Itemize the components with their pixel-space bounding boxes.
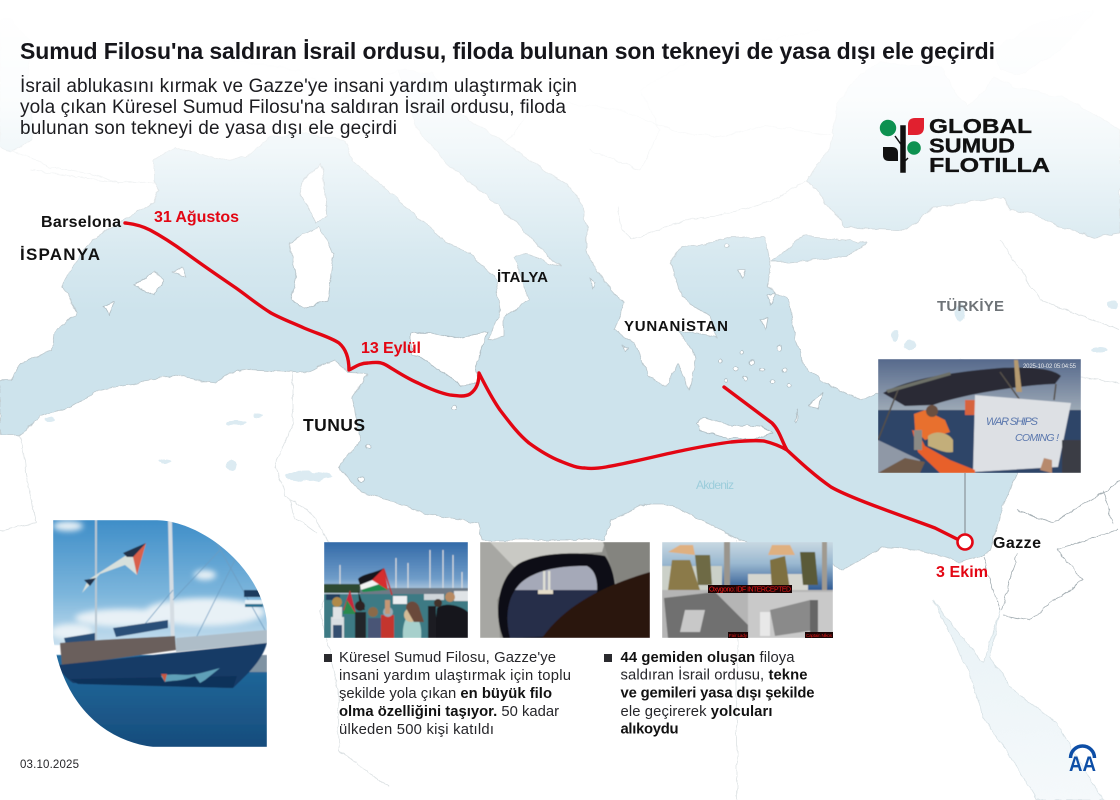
islands xyxy=(104,163,822,483)
text block: bullet 1: ülkeden 500 kişi katıldı xyxy=(339,722,494,738)
date labels: 13 Eylül xyxy=(361,340,421,357)
text block: bullet 2: saldıran İsrail ordusu, tekne xyxy=(620,666,808,684)
sea label: Akdeniz xyxy=(696,478,734,492)
sea: Bay of Biscay xyxy=(0,19,32,152)
text block: bullet 2: 44 gemiden oluşan filoya xyxy=(620,650,795,666)
photo: war ships coming: 2025-10-02 05:04:55 xyxy=(1023,364,1077,370)
sea: Red Sea and gulfs xyxy=(933,600,1103,800)
logo: Global Sumud Flotilla: GLOBAL xyxy=(929,115,1032,138)
people xyxy=(331,592,468,638)
sea: Black Sea xyxy=(807,62,1120,237)
place labels: İSPANYA xyxy=(20,245,100,264)
text block: bullet 2 xyxy=(604,650,814,738)
subtitle: bulunan son tekneyi de yasa dışı ele geçirdi xyxy=(20,118,397,139)
text block: bullet 1: şekilde yola çıkan en büyük filo xyxy=(339,686,552,702)
Gaza marker leader line xyxy=(964,473,966,534)
route line xyxy=(125,223,957,539)
place labels: TUNUS xyxy=(303,415,365,435)
sea: Mediterranean xyxy=(0,70,1040,570)
date labels: 3 Ekim xyxy=(936,564,988,581)
subtitle: İsrail ablukasını kırmak ve Gazze'ye insani yardım ulaştırmak için xyxy=(20,76,577,97)
text block: bullet 2: ele geçirerek yolcuları xyxy=(620,704,772,720)
place labels: Barselona xyxy=(41,214,121,231)
sea: Azov xyxy=(994,10,1094,75)
logo: Global Sumud Flotilla: SUMUD xyxy=(929,134,1015,158)
place labels: TÜRKİYE xyxy=(937,298,1004,315)
photo: crowd with flags at harbour xyxy=(324,542,468,638)
text block: bullet 1 xyxy=(324,650,571,738)
porthole ring xyxy=(498,553,615,638)
text block: bullet 1: olma özelliğini taşıyor. 50 kadar xyxy=(339,704,559,720)
text block: bullet 1: insani yardım ulaştırmak için toplu xyxy=(339,668,571,684)
photo: yacht seen through porthole xyxy=(480,542,650,640)
photo: war ships coming xyxy=(878,359,1081,473)
logo: Anadolu Agency: AA xyxy=(1069,753,1096,776)
place labels: YUNANİSTAN xyxy=(624,318,728,335)
date labels xyxy=(154,209,988,581)
photo: intercepted boat cameras xyxy=(662,542,833,638)
date: 03.10.2025 xyxy=(20,759,79,771)
photo: intercepted boat cameras: Oxygono: IDF INTERCEPTED xyxy=(709,586,791,594)
photo: sailboat xyxy=(50,520,267,747)
photo: intercepted boat cameras: Captain Nikos xyxy=(806,633,833,638)
logo: Global Sumud Flotilla: FLOTILLA xyxy=(929,154,1050,177)
photo: war ships coming: COMING ! xyxy=(1015,432,1059,444)
logo: Global Sumud Flotilla xyxy=(880,115,1050,177)
place labels xyxy=(20,214,1041,552)
subtitle xyxy=(20,76,577,139)
big flag xyxy=(358,568,385,585)
date labels: 31 Ağustos xyxy=(154,209,239,226)
place labels: Gazze xyxy=(993,535,1041,552)
text block: bullet 1: Küresel Sumud Filosu, Gazze'ye xyxy=(339,650,556,666)
title: Sumud Filosu'na saldıran İsrail ordusu, filoda bulunan son tekneyi de yasa dışı ele geçirdi xyxy=(20,38,995,64)
lakes xyxy=(45,301,1118,481)
photo: war ships coming: WAR SHIPS xyxy=(986,416,1039,428)
sea: Marmara xyxy=(771,236,867,262)
text block: bullet 2: alıkoydu xyxy=(620,722,678,738)
text block: bullet 2: ve gemileri yasa dışı şekilde xyxy=(620,686,814,702)
photo: intercepted boat cameras: Fair Lady xyxy=(729,633,748,638)
Gaza marker xyxy=(958,534,972,550)
place labels: İTALYA xyxy=(497,269,548,286)
subtitle: yola çıkan Küresel Sumud Filosu'na saldıran İsrail ordusu, filoda xyxy=(20,97,566,118)
